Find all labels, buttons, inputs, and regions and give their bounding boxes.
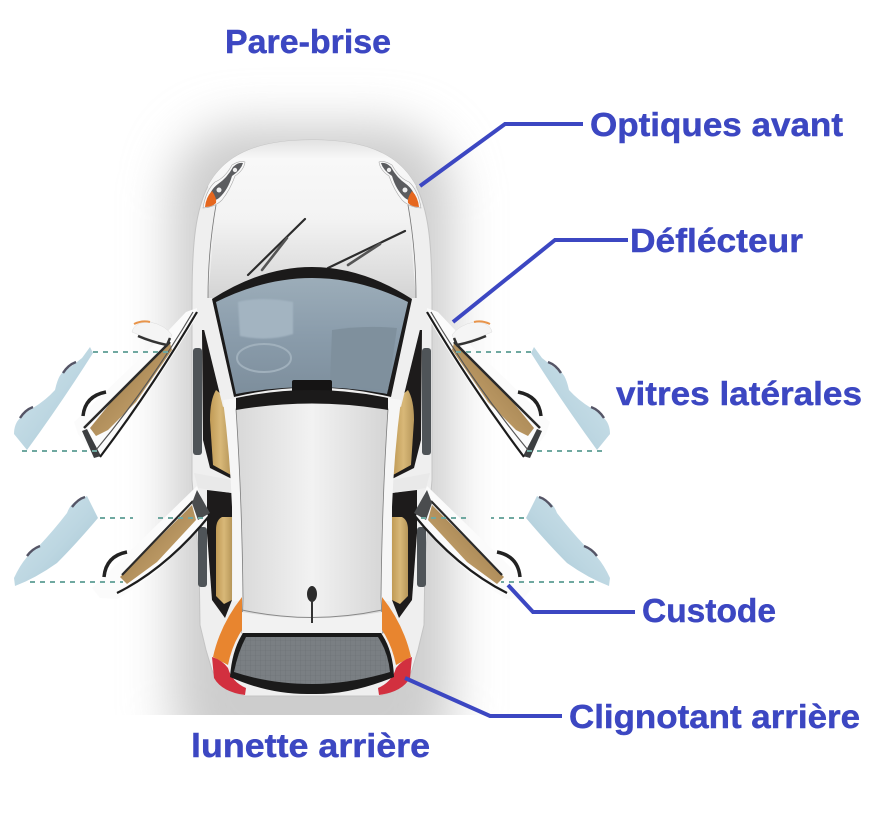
label: clignotant arrière: Clignotant arrière bbox=[569, 698, 860, 735]
body shell bbox=[192, 140, 432, 696]
label: custode: Custode bbox=[642, 592, 776, 629]
wipers bbox=[248, 219, 405, 275]
front right headlight bbox=[379, 161, 421, 208]
roof side rails bbox=[223, 398, 244, 602]
right front cabin opening with seat bbox=[392, 330, 431, 479]
left rear cabin opening with seat bbox=[198, 490, 232, 618]
hood bbox=[208, 140, 416, 298]
roof bbox=[236, 402, 388, 633]
leader line: clignotant arrière bbox=[405, 678, 562, 716]
rear window bbox=[230, 633, 394, 694]
A pillars bbox=[200, 300, 237, 407]
car body bbox=[192, 140, 432, 696]
right side windows with dotted guide lines bbox=[421, 347, 610, 586]
leader line: déflecteur bbox=[453, 240, 628, 322]
front left headlight bbox=[203, 161, 245, 208]
right red lamp bbox=[378, 657, 412, 695]
left side windows with dotted guide lines bbox=[14, 347, 203, 586]
label: lunette arrière: lunette arrière bbox=[191, 727, 430, 764]
B pillars bbox=[194, 473, 232, 493]
label: déflecteur: Déflécteur bbox=[630, 222, 803, 259]
windshield bbox=[212, 267, 412, 397]
label: optiques avant: Optiques avant bbox=[590, 106, 843, 143]
left front cabin opening with seat bbox=[193, 330, 232, 479]
right doors bbox=[414, 308, 550, 599]
left doors bbox=[74, 308, 210, 599]
right orange rear lamp bbox=[382, 597, 411, 665]
left red lamp bbox=[212, 657, 246, 695]
label: pare-brise: Pare-brise bbox=[225, 23, 391, 60]
right rear cabin opening with seat bbox=[392, 490, 426, 618]
leader line: optiques avant bbox=[420, 124, 583, 186]
leader line: custode bbox=[508, 585, 635, 612]
background shadow glow bbox=[172, 125, 452, 775]
left orange rear lamp bbox=[213, 597, 242, 665]
antenna bbox=[307, 586, 317, 623]
label: vitres latérales: vitres latérales bbox=[616, 375, 862, 412]
